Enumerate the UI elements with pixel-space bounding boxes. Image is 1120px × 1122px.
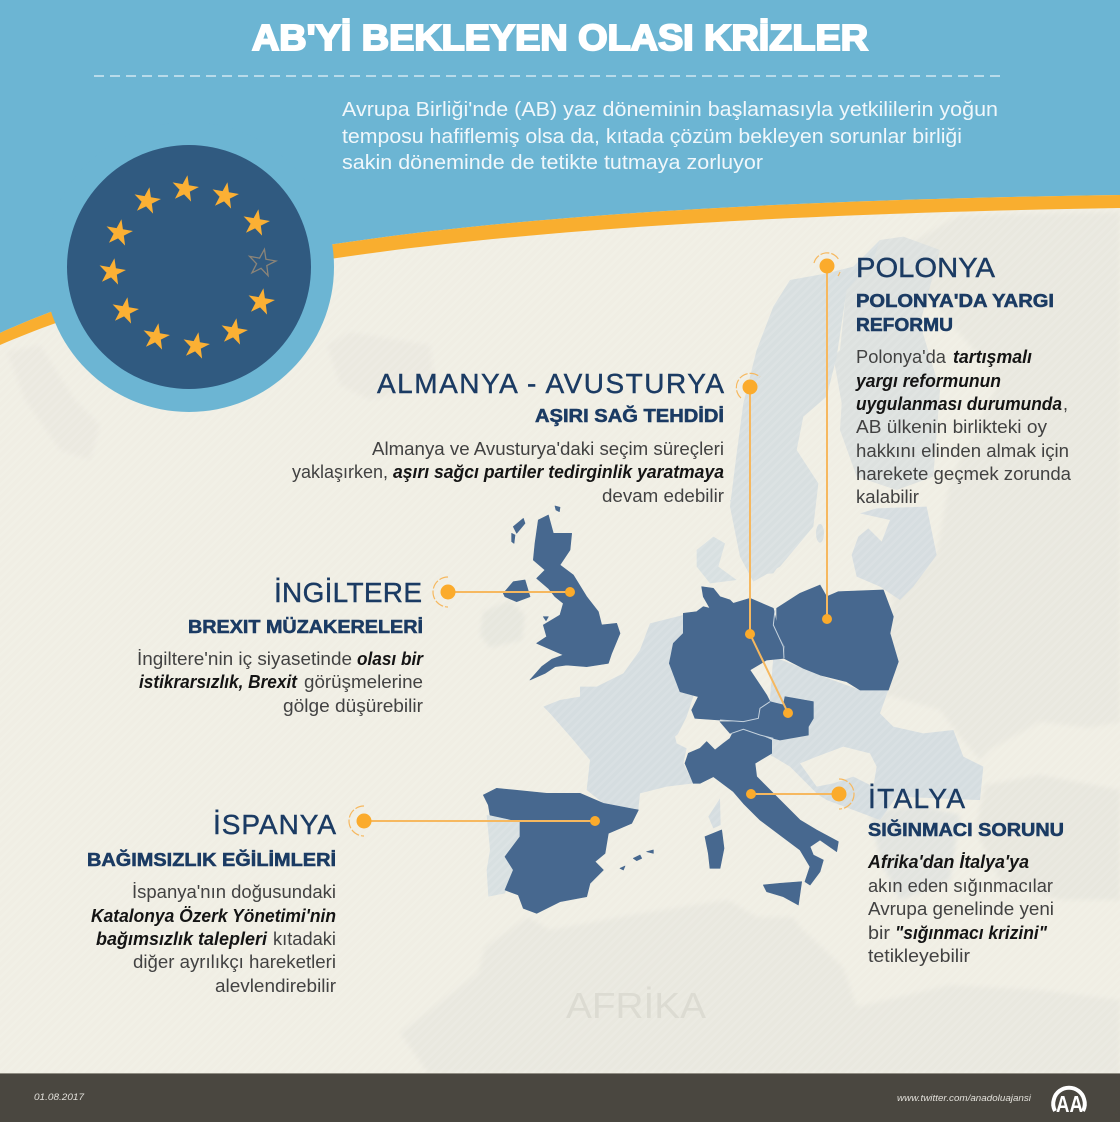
subheading: SIĞINMACI SORUNU [868, 819, 1064, 840]
country: Italy [685, 730, 838, 905]
body: hakkını elinden almak için [856, 441, 1069, 461]
land: Portugal [487, 815, 523, 897]
body: diğer ayrılıkçı hareketleri [133, 952, 336, 972]
body: istikrarsızlık, Brexit [139, 672, 298, 692]
body [867, 852, 1054, 966]
land: Denmark [697, 537, 737, 583]
country borders [720, 610, 784, 738]
website: www.twitter.com/anadoluajansi [897, 1093, 1032, 1104]
body: Almanya ve Avusturya'daki seçim süreçleri [372, 439, 724, 459]
panel: Polonya [855, 252, 1072, 507]
body: kalabilir [856, 487, 919, 507]
body [292, 439, 724, 506]
body: harekete geçmek zorunda [856, 464, 1072, 484]
body: uygulanması durumunda [856, 394, 1062, 414]
panel: İtalya [867, 783, 1064, 966]
connector: İspanya [349, 806, 600, 836]
body [91, 882, 336, 996]
land: Finland [833, 237, 940, 490]
connector: Almanya - Avusturya [736, 373, 793, 718]
country: Germany [669, 587, 784, 722]
body: İngiltere'nin iç siyasetinde [137, 649, 352, 669]
body: AB ülkenin birlikteki oy [856, 417, 1047, 437]
highlighted countries map [483, 506, 898, 913]
subheading: POLONYA'DA YARGI [856, 290, 1054, 311]
land: Switzerland gap [675, 718, 732, 750]
land: far faded regions [7, 212, 1120, 1073]
intro text [342, 99, 998, 174]
land: Africa [400, 900, 1120, 1073]
country: Northern Ireland [503, 580, 530, 602]
country: Austria [720, 697, 813, 740]
subheading: AŞIRI SAĞ TEHDİDİ [535, 405, 724, 426]
body: görüşmelerine [304, 672, 423, 692]
body: "sığınmacı krizini" [895, 923, 1047, 943]
land: Gotland [816, 524, 824, 543]
body: Afrika'dan İtalya'ya [867, 852, 1029, 872]
body: , [1063, 394, 1068, 414]
heading: İNGİLTERE [274, 577, 422, 608]
subheading: REFORMU [856, 314, 953, 335]
land: Greenland fade [7, 345, 100, 460]
land: central Europe, Balkans [487, 500, 983, 897]
body: akın eden sığınmacılar [868, 876, 1053, 896]
panel: Almanya - Avusturya [292, 368, 724, 506]
body [137, 649, 424, 716]
orange curve [0, 195, 1120, 345]
body: tartışmalı [953, 347, 1032, 367]
heading: İTALYA [868, 783, 965, 814]
footer [0, 1073, 1120, 1122]
subheading: BAĞIMSIZLIK EĞİLİMLERİ [87, 849, 336, 870]
body: olası bir [357, 649, 424, 669]
outlined leaving star [247, 247, 278, 277]
panel: İngiltere [137, 577, 424, 716]
country: Poland [773, 585, 898, 690]
heading: ALMANYA - AVUSTURYA [377, 368, 724, 399]
land: Greece fade [870, 805, 960, 900]
body: İspanya'nın doğusundaki [132, 882, 336, 902]
body: Katalonya Özerk Yönetimi'nin [91, 906, 336, 926]
map label: Afrika: AFRİKA [566, 985, 706, 1026]
body: alevlendirebilir [215, 976, 336, 996]
intro text: sakin döneminde de tetikte tutmaya zorluyor [342, 152, 763, 174]
intro text: Avrupa Birliği'nde (AB) yaz döneminin başlamasıyla yetkililerin yoğun [342, 99, 998, 121]
disc [67, 145, 311, 389]
body: aşırı sağcı partiler tedirginlik yaratmaya [393, 462, 724, 482]
heading: İSPANYA [213, 809, 336, 840]
body: kıtadaki [273, 929, 336, 949]
heading: POLONYA [856, 252, 995, 283]
country: Spain [483, 788, 653, 913]
subheading [856, 290, 1054, 335]
land: Norway and Sweden [730, 240, 880, 582]
body: yaklaşırken, [292, 462, 388, 482]
body: Avrupa genelinde yeni [868, 899, 1054, 919]
body: bağımsızlık talepleri [96, 929, 268, 949]
date: 01.08.2017 [34, 1092, 85, 1103]
ring [44, 122, 334, 412]
body: Polonya'da [856, 347, 947, 367]
intro text: temposu hafiflemiş olsa da, kıtada çözüm bekleyen sorunlar birliği [342, 126, 962, 148]
land: Russia and eastern Europe [880, 212, 1120, 760]
body [855, 347, 1072, 507]
icon: Anadolu Agency logo: AA [1056, 1091, 1083, 1117]
connector: Polonya [814, 253, 840, 624]
land: Ireland fade [480, 600, 525, 648]
land: Baltic states [852, 507, 937, 600]
title: AB'Yİ BEKLEYEN OLASI KRİZLER [252, 17, 868, 58]
land: Sweden south tip [730, 500, 800, 575]
body: tetikleyebilir [868, 946, 970, 966]
connector: İtalya [746, 779, 854, 809]
stars [97, 173, 277, 360]
header band [0, 0, 1120, 333]
country: Great Britain [512, 506, 620, 680]
connector: İngiltere [433, 577, 575, 607]
land: Corsica [708, 798, 721, 828]
body: gölge düşürebilir [283, 696, 423, 716]
background map: faded land masses [7, 212, 1120, 1073]
land: Iceland fade [327, 332, 435, 400]
EU emblem circle [44, 122, 334, 412]
panel: İspanya [87, 809, 336, 996]
land: Turkey [975, 775, 1120, 900]
land: France and Benelux [543, 615, 693, 810]
body: yargı reformunun [855, 371, 1001, 391]
subheading: BREXIT MÜZAKERELERİ [188, 616, 423, 637]
body: devam edebilir [602, 486, 724, 506]
body: bir [868, 923, 890, 943]
